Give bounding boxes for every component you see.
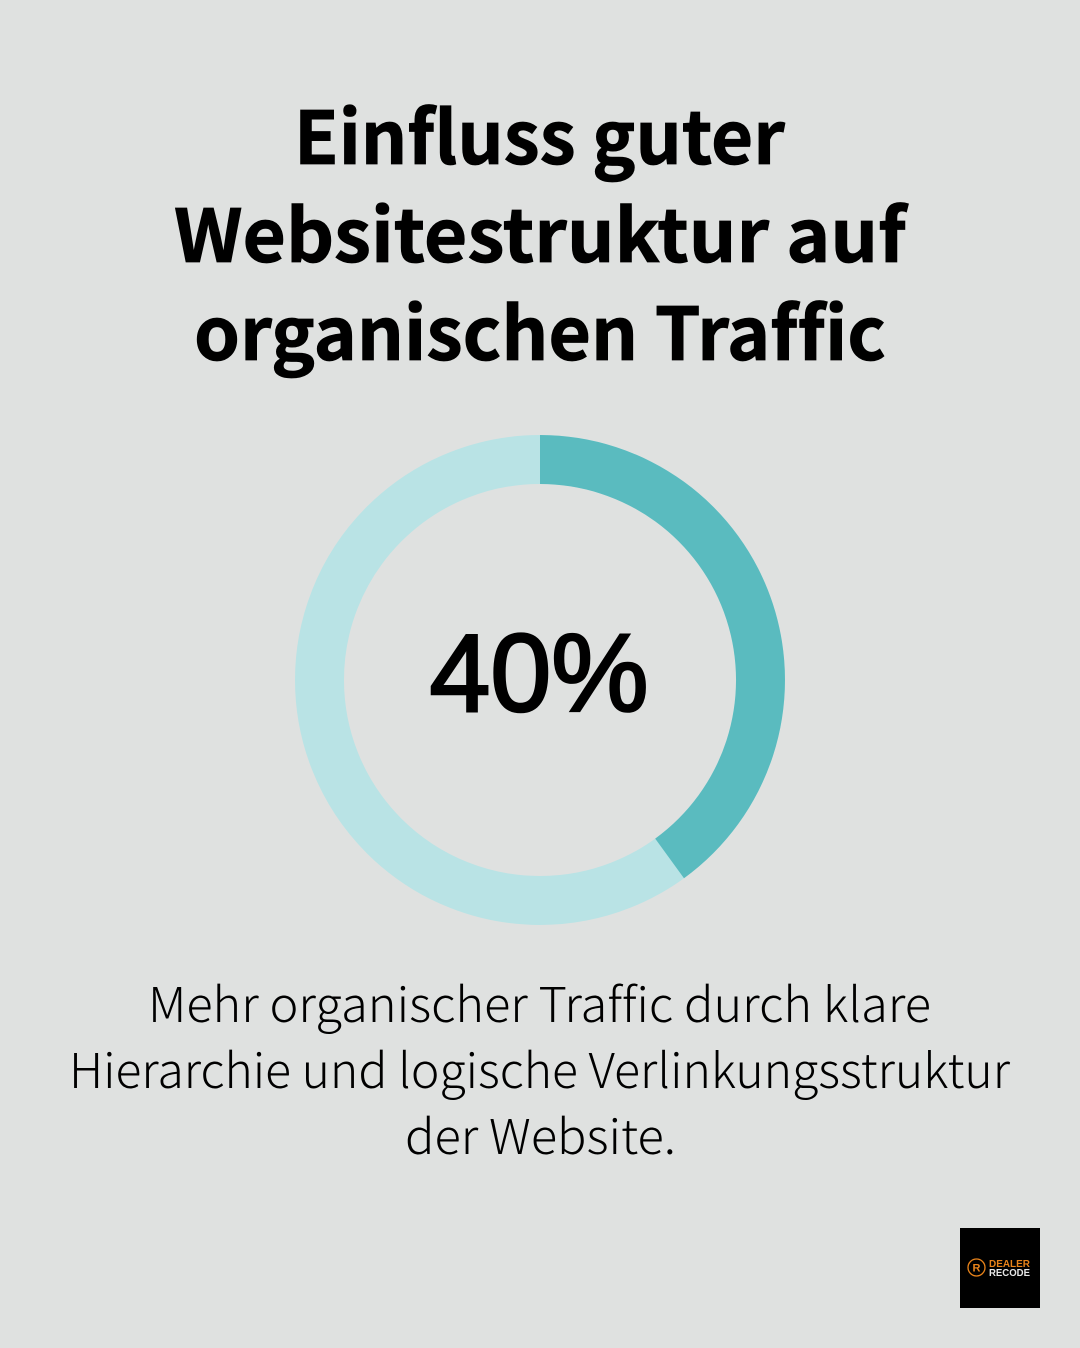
description text: Hierarchie und logische Verlinkungsstruktur — [69, 1032, 1011, 1102]
logo: Dealer Recode: R — [973, 1262, 981, 1274]
description text — [69, 966, 1011, 1168]
title: Einfluss guter — [294, 80, 785, 186]
description text: Mehr organischer Traffic durch klare — [148, 966, 931, 1036]
donut chart: 40% — [320, 435, 785, 900]
percentage value: 40% — [430, 612, 648, 735]
title: organischen Traffic — [194, 276, 886, 382]
logo: Dealer Recode: RECODE — [989, 1268, 1030, 1279]
logo: Dealer Recode: DEALER — [989, 1259, 1031, 1270]
title: Websitestruktur auf — [174, 178, 909, 284]
description text: der Website. — [405, 1098, 676, 1168]
logo: Dealer Recode — [960, 1228, 1040, 1308]
title — [174, 80, 909, 382]
